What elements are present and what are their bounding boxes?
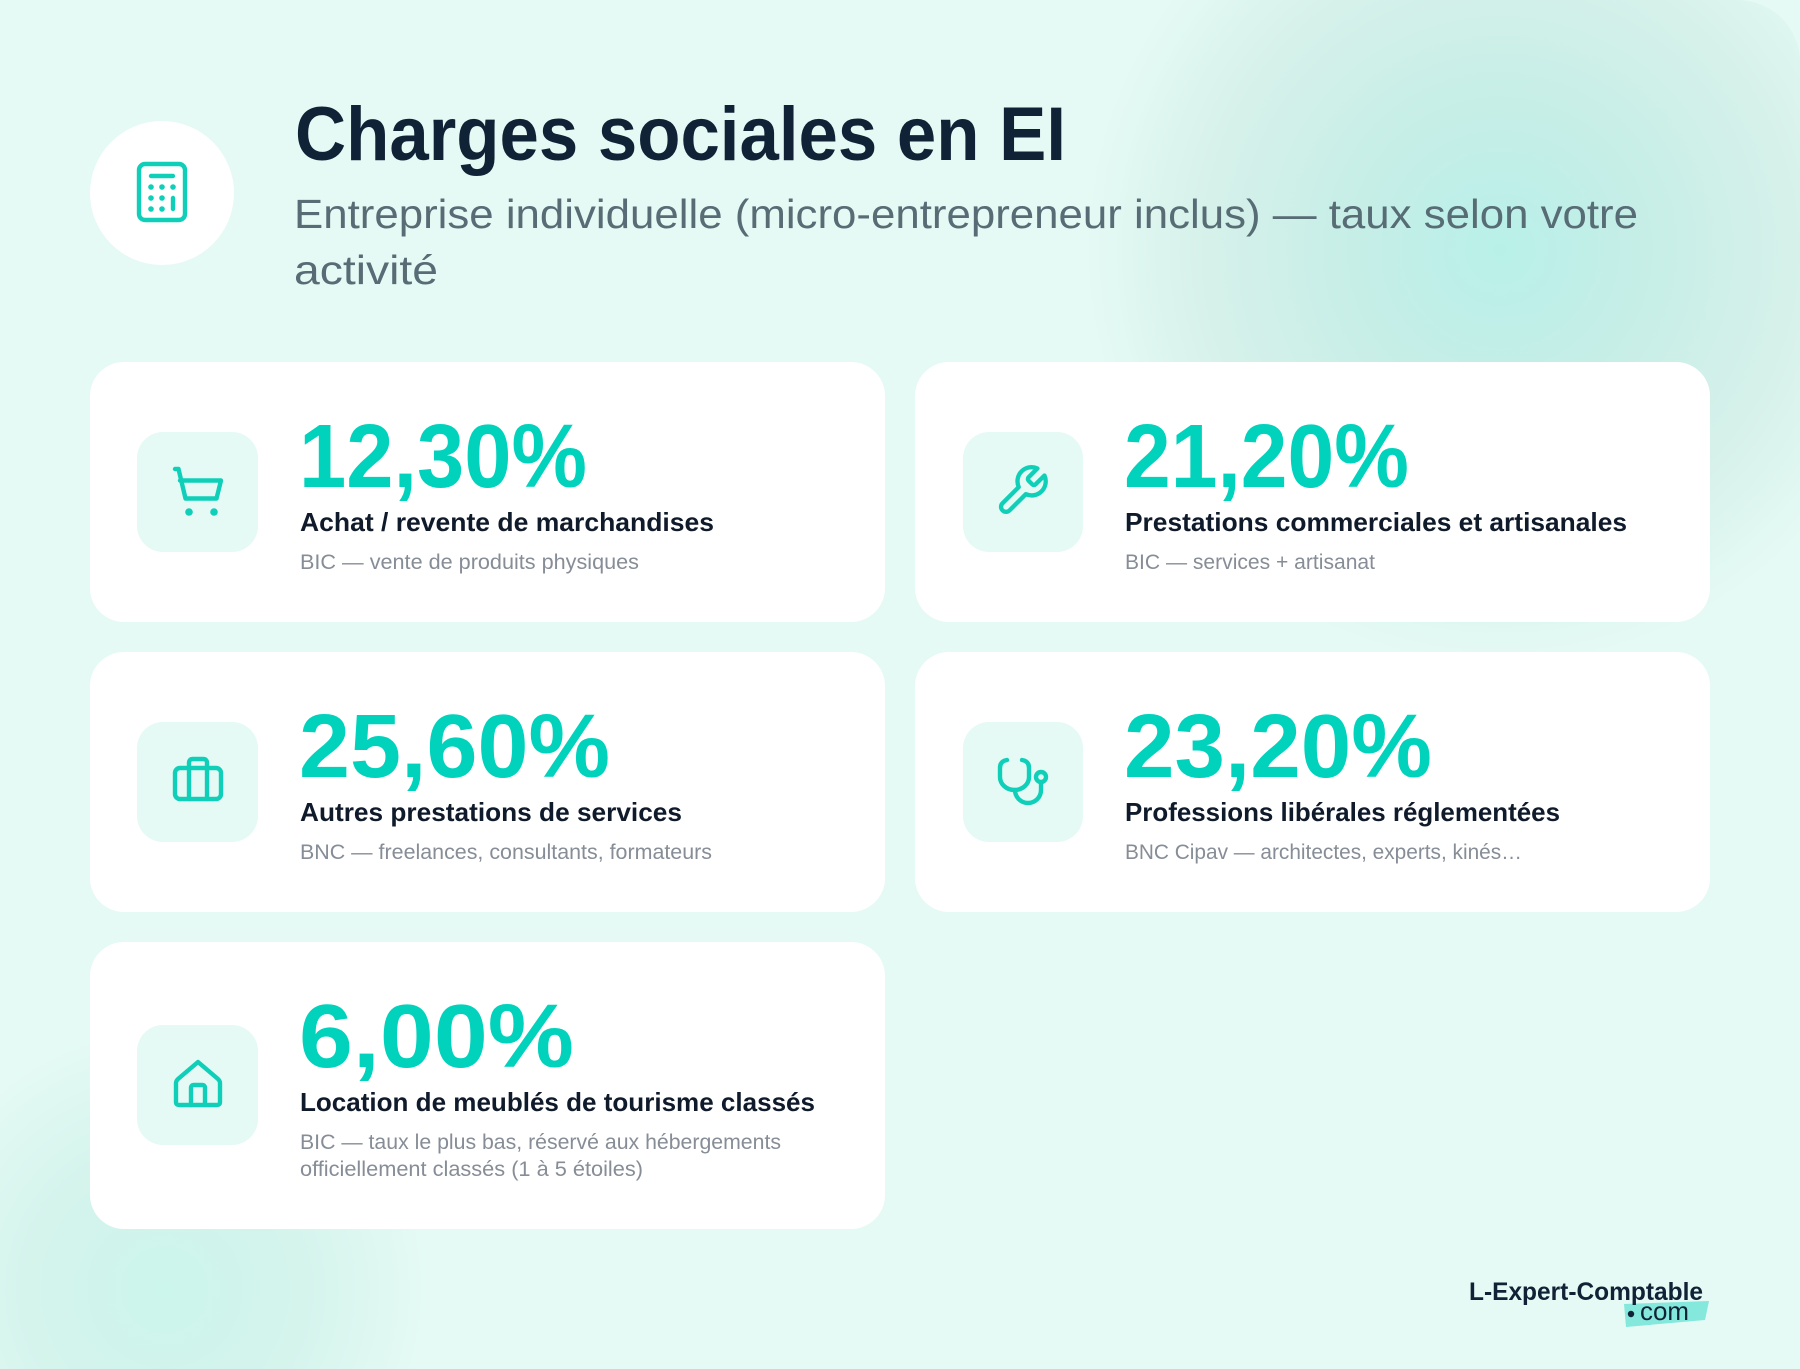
rate: 6,00% <box>299 987 574 1087</box>
title: Charges sociales en EI <box>295 92 1066 177</box>
description: BIC — services + artisanat <box>1125 551 1375 574</box>
icon: wrench <box>963 432 1083 552</box>
label: Location de meublés de tourisme classés <box>300 1087 815 1117</box>
panel: achat revente <box>90 362 885 622</box>
icon: briefcase <box>137 722 258 842</box>
header icon: calculator <box>90 121 234 265</box>
label: Achat / revente de marchandises <box>300 507 714 537</box>
panel: location meublés <box>90 942 885 1229</box>
rate: 21,20% <box>1124 407 1409 507</box>
panel: professions libérales <box>915 652 1710 912</box>
label: Professions libérales réglementées <box>1125 797 1560 827</box>
logo: L-Expert-Comptable <box>1469 1278 1703 1306</box>
description: BNC — freelances, consultants, formateurs <box>300 841 712 864</box>
rate: 25,60% <box>299 697 610 797</box>
logo: com <box>1640 1296 1689 1326</box>
subtitle: activité <box>294 247 438 293</box>
description: BIC — taux le plus bas, réservé aux hébergements <box>300 1131 781 1154</box>
panel: autres prestations <box>90 652 885 912</box>
subtitle <box>294 191 1638 293</box>
description <box>300 1131 781 1181</box>
icon: shopping cart <box>137 432 258 552</box>
description: officiellement classés (1 à 5 étoiles) <box>300 1158 643 1181</box>
subtitle: Entreprise individuelle (micro-entrepreneur inclus) — taux selon votre <box>294 191 1638 237</box>
icon: house <box>137 1025 258 1145</box>
description: BIC — vente de produits physiques <box>300 551 639 574</box>
logo <box>1469 1278 1709 1327</box>
icon: stethoscope <box>963 722 1083 842</box>
label: Autres prestations de services <box>300 797 682 827</box>
panel: prestations commerciales <box>915 362 1710 622</box>
rate: 12,30% <box>299 407 587 507</box>
rate: 23,20% <box>1124 697 1432 797</box>
description: BNC Cipav — architectes, experts, kinés… <box>1125 841 1522 864</box>
label: Prestations commerciales et artisanales <box>1125 507 1627 537</box>
